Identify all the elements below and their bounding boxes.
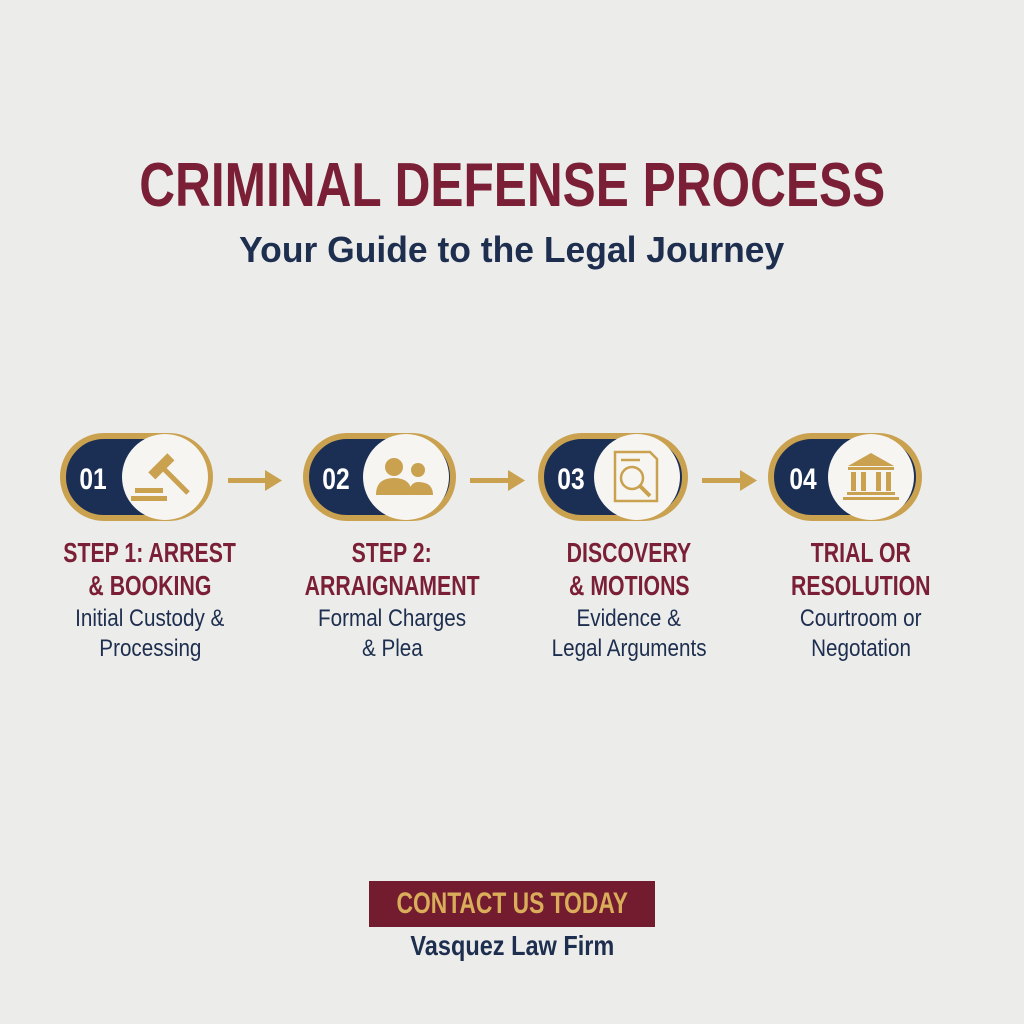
step 2 description: Formal Charges <box>318 605 466 632</box>
pill 04 <box>771 434 919 520</box>
step 4 description <box>800 605 922 662</box>
step 3 description: Evidence & <box>577 605 681 632</box>
pill 04: 04 <box>789 462 817 496</box>
title: CRIMINAL DEFENSE PROCESS <box>139 151 885 220</box>
step 1 description: Processing <box>99 635 201 662</box>
step 1 text <box>64 537 236 662</box>
step 1 heading <box>64 537 236 601</box>
icon: document search <box>615 452 657 501</box>
arrow 2 <box>470 470 525 491</box>
pill 01: 01 <box>79 462 107 496</box>
process flow graphic <box>60 433 922 521</box>
step 2 heading: STEP 2: <box>352 537 432 568</box>
step 4 heading: TRIAL OR <box>811 537 911 568</box>
arrow 3 <box>702 470 757 491</box>
pill 03: 03 <box>557 462 585 496</box>
step 3 description: Legal Arguments <box>552 635 706 662</box>
step 1 heading: STEP 1: ARREST <box>64 537 236 568</box>
pill 01 <box>63 434 210 520</box>
step 3 text <box>552 537 706 662</box>
step 4 description: Courtroom or <box>800 605 922 632</box>
step 3 heading <box>567 537 691 601</box>
icon: gavel <box>131 454 188 501</box>
arrow 1 <box>228 470 282 491</box>
step 1 description: Initial Custody & <box>75 605 225 632</box>
step 2 text <box>305 537 480 662</box>
step 1 heading: & BOOKING <box>89 570 211 601</box>
step 3 description <box>552 605 706 662</box>
step 4 heading <box>791 537 931 601</box>
step 2 description <box>318 605 466 662</box>
pill 02: 02 <box>322 462 350 496</box>
step 2 heading: ARRAIGNAMENT <box>305 570 479 601</box>
pill 02 <box>306 434 453 520</box>
step 3 heading: DISCOVERY <box>567 537 691 568</box>
step 1 description <box>75 605 225 662</box>
step 2 description: & Plea <box>362 635 422 662</box>
step 3 heading: & MOTIONS <box>569 570 689 601</box>
contact button <box>369 881 655 927</box>
contact button: CONTACT US TODAY <box>396 887 628 920</box>
step 4 text <box>791 537 931 662</box>
step 4 description: Negotation <box>811 635 911 662</box>
pill 03 <box>541 434 685 520</box>
subtitle: Your Guide to the Legal Journey <box>239 229 785 270</box>
step 4 heading: RESOLUTION <box>791 570 931 601</box>
icon: people <box>376 458 433 495</box>
firm name: Vasquez Law Firm <box>410 930 614 961</box>
icon: courthouse <box>843 453 899 500</box>
step 2 heading <box>305 537 480 601</box>
